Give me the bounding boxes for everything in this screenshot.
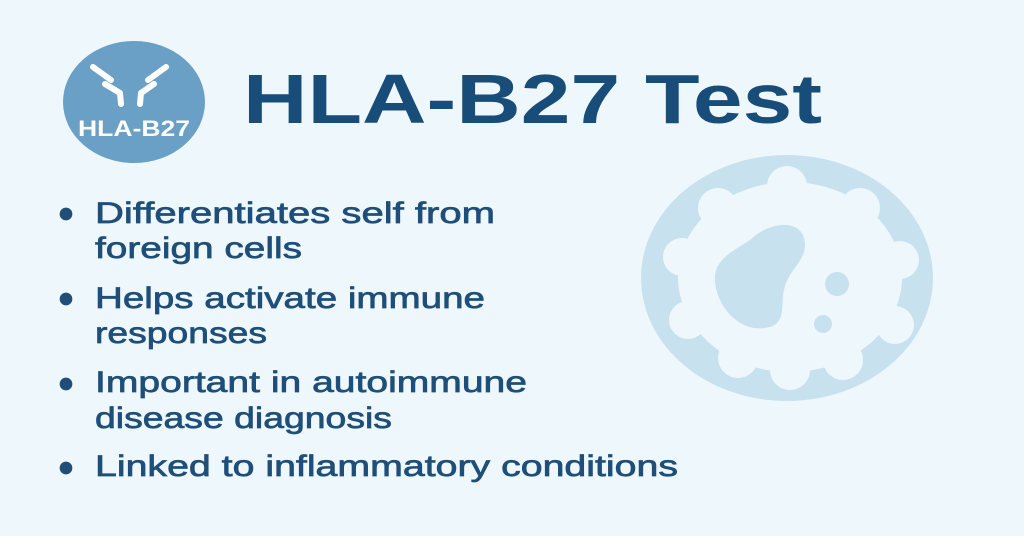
- badge: HLA-B27: HLA-B27: [78, 116, 190, 141]
- bullet 3: Important in autoimmune: [95, 366, 527, 399]
- badge: HLA-B27: [63, 41, 205, 163]
- bullet 2: Helps activate immune: [95, 282, 485, 315]
- bullet 1: Differentiates self from: [95, 197, 495, 230]
- bullet 1: [60, 197, 495, 265]
- bullet 2: [60, 282, 485, 350]
- bullet 3: disease diagnosis: [95, 402, 392, 435]
- nucleus: [715, 225, 805, 328]
- title: HLA-B27 Test: [243, 60, 822, 138]
- bullet 1: foreign cells: [95, 232, 302, 265]
- bullet list: [60, 197, 678, 483]
- bullet 2: responses: [95, 317, 267, 350]
- illustration: immune cell: [641, 155, 933, 401]
- bullet 4: Linked to inflammatory conditions: [95, 450, 678, 483]
- icon: antibody: [93, 67, 166, 104]
- bullet 3: [60, 366, 527, 435]
